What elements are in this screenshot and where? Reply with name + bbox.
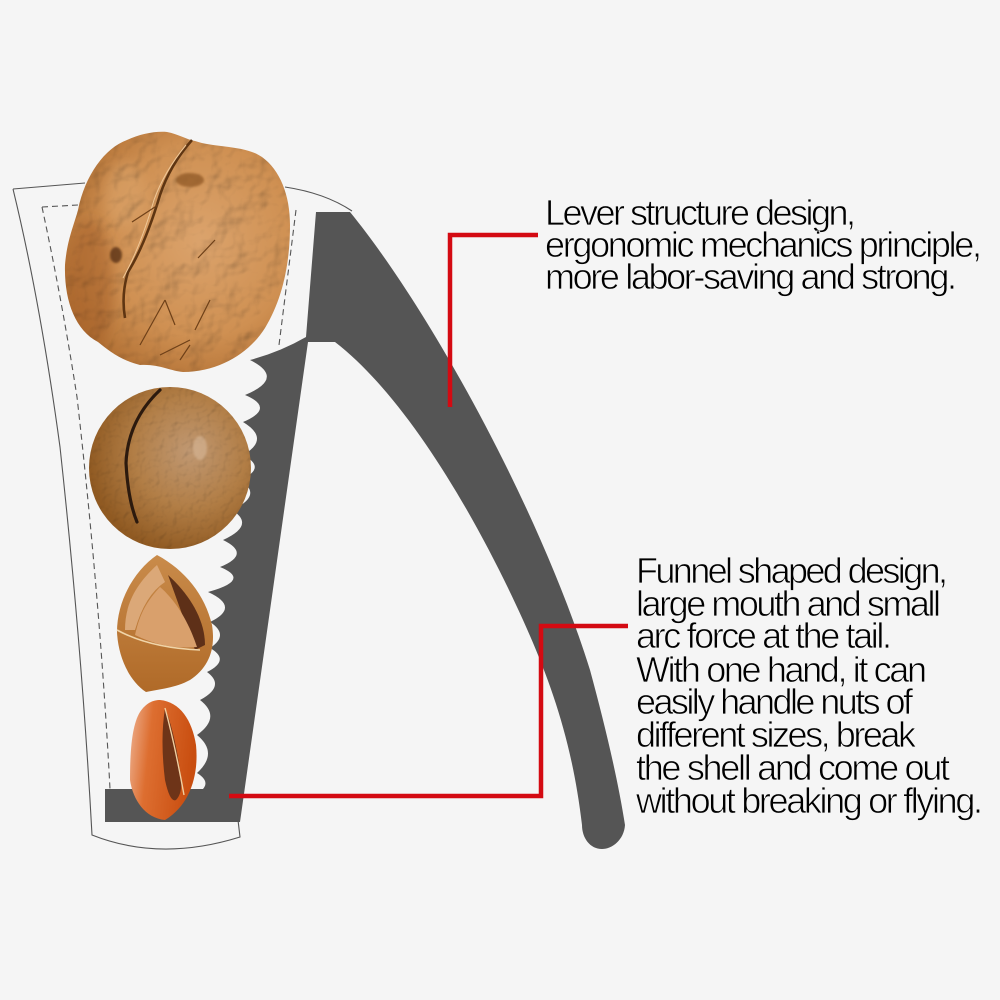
macadamia nut [88,386,252,550]
text block: funnel shape: arc force at the tail. [636,615,892,656]
text block: funnel shape: the shell and come out [636,747,950,788]
walnut [60,128,295,376]
text block: lever structure [545,192,982,297]
red leader line: funnel [229,626,628,796]
text block: funnel shape: With one hand, it can [636,649,927,690]
text block: funnel shape: Funnel shaped design, [636,550,948,591]
text block: funnel shape: large mouth and small [636,583,941,624]
funnel outline [13,183,352,849]
text block: funnel shape: without breaking or flying. [635,780,983,821]
text block: lever structure: Lever structure design, [545,192,856,233]
text block: funnel shape [635,550,983,821]
almond in shell [117,555,213,692]
red leader line: lever [450,235,538,407]
text block: lever structure: more labor-saving and strong. [545,256,957,297]
pecan [130,700,197,820]
text block: funnel shape: easily handle nuts of [636,681,914,722]
text block: lever structure: ergonomic mechanics principle, [545,224,982,265]
text block: funnel shape: different sizes, break [636,714,917,755]
lever body [105,212,625,849]
